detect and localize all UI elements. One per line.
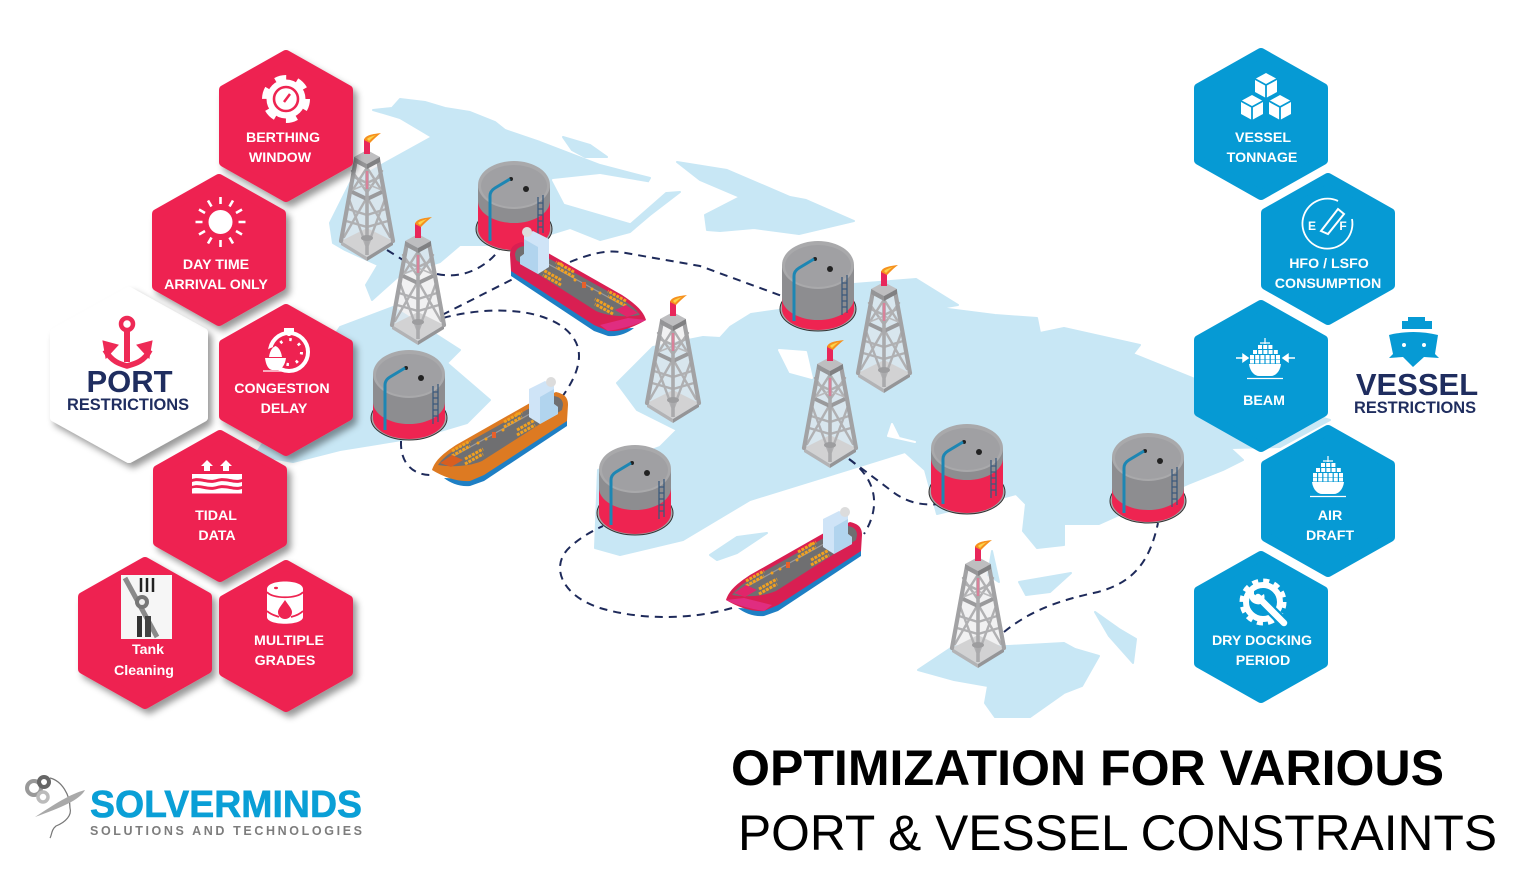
red tanker north: [510, 227, 646, 336]
label: DATA: [198, 528, 236, 544]
storage tank 5: [929, 424, 1005, 514]
oil rig 4: [858, 265, 910, 393]
title: OPTIMIZATION FOR VARIOUS: [731, 740, 1444, 796]
hex: berthing window: [224, 55, 348, 197]
storage tank 1: [476, 161, 552, 251]
label: PERIOD: [1236, 653, 1290, 669]
world map: [255, 99, 1330, 717]
label: Cleaning: [114, 663, 174, 679]
panel: vessel restrictions: [1199, 53, 1478, 698]
orange tanker: [432, 377, 568, 486]
label: [164, 257, 268, 293]
label: [1212, 633, 1312, 669]
label: DELAY: [261, 401, 308, 417]
icon: vessel: [1389, 317, 1439, 367]
oil rig 6: [952, 540, 1004, 668]
oil rig 3: [647, 295, 699, 423]
label: [1306, 508, 1354, 544]
hex: beam: [1199, 305, 1323, 447]
hex: tidal data: [158, 435, 282, 577]
hex: tank cleaning: [83, 562, 207, 704]
storage tank 4: [597, 445, 673, 535]
icon: fuel gauge: [1302, 199, 1352, 249]
logo: Solverminds: [27, 777, 362, 838]
label: BEAM: [1243, 393, 1285, 409]
route lines: [387, 250, 1158, 632]
icon: sun: [196, 197, 246, 247]
hexagon: port heading: [55, 292, 203, 458]
icon: cubes: [1241, 73, 1291, 120]
icon: stopwatch and ship: [263, 328, 308, 371]
heading: VESSEL RESTRICTIONS: VESSEL: [1356, 367, 1478, 402]
hex: day time arrival only: [157, 179, 281, 321]
label: [114, 642, 174, 679]
label: [195, 508, 237, 544]
label: Tank: [132, 642, 164, 658]
label: MULTIPLE: [254, 633, 324, 649]
title: PORT & VESSEL CONSTRAINTS: [738, 805, 1497, 861]
label: [1275, 256, 1381, 292]
oil rig 1: [341, 133, 393, 261]
storage tank 2: [371, 350, 447, 440]
icon: gear and wrench: [1242, 581, 1284, 623]
heading: VESSEL RESTRICTIONS: [1354, 367, 1478, 417]
heading: VESSEL RESTRICTIONS: RESTRICTIONS: [1354, 399, 1476, 417]
label: CONSUMPTION: [1275, 276, 1381, 292]
label: BERTHING: [246, 130, 320, 146]
label: [234, 381, 330, 417]
label: TIDAL: [195, 508, 237, 524]
label: DRAFT: [1306, 528, 1354, 544]
label: ARRIVAL ONLY: [164, 277, 268, 293]
hex: multiple grades: [224, 565, 348, 707]
label: [246, 130, 320, 166]
label: [254, 633, 324, 669]
panel: port restrictions: [55, 55, 348, 707]
hex: vessel tonnage: [1199, 53, 1323, 195]
label: VESSEL: [1235, 130, 1291, 146]
icon: fuel gauge: E: [1308, 219, 1316, 233]
label: AIR: [1318, 508, 1342, 524]
icon: container ship: [1310, 456, 1346, 496]
icon: gauge gear: [265, 78, 307, 120]
icon: anchor: [103, 318, 152, 366]
oil rig 5: [804, 340, 856, 468]
oil rig 2: [392, 217, 444, 345]
hex: hfo lsfo consumption: [1266, 178, 1390, 320]
wordmark: SOLVERMINDS: [90, 784, 362, 826]
icon: ship with beam arrows: [1236, 338, 1295, 378]
icon: tide waves: [192, 460, 242, 494]
tagline: SOLUTIONS AND TECHNOLOGIES: [90, 824, 362, 838]
label: WINDOW: [249, 150, 312, 166]
icon: oil barrel: [267, 582, 303, 624]
heading: PORT RESTRICTIONS: [67, 364, 189, 414]
hex: dry docking period: [1199, 556, 1323, 698]
label: TONNAGE: [1227, 150, 1297, 166]
icon: gears and head: [27, 777, 85, 838]
heading: PORT RESTRICTIONS: PORT: [86, 364, 173, 399]
storage tank 3: [780, 241, 856, 331]
label: GRADES: [255, 653, 315, 669]
label: DAY TIME: [183, 257, 249, 273]
icon: tank cleaning machine: [121, 575, 172, 639]
title: [731, 740, 1497, 861]
label: DRY DOCKING: [1212, 633, 1312, 649]
label: [1227, 130, 1297, 166]
red tanker south: [726, 507, 862, 616]
label: HFO / LSFO: [1289, 256, 1369, 272]
hex: air draft: [1266, 430, 1390, 572]
icon: fuel gauge: F: [1339, 219, 1347, 233]
heading: PORT RESTRICTIONS: RESTRICTIONS: [67, 396, 189, 414]
label: CONGESTION: [234, 381, 330, 397]
storage tank 6: [1110, 433, 1186, 523]
hex: congestion delay: [224, 309, 348, 451]
